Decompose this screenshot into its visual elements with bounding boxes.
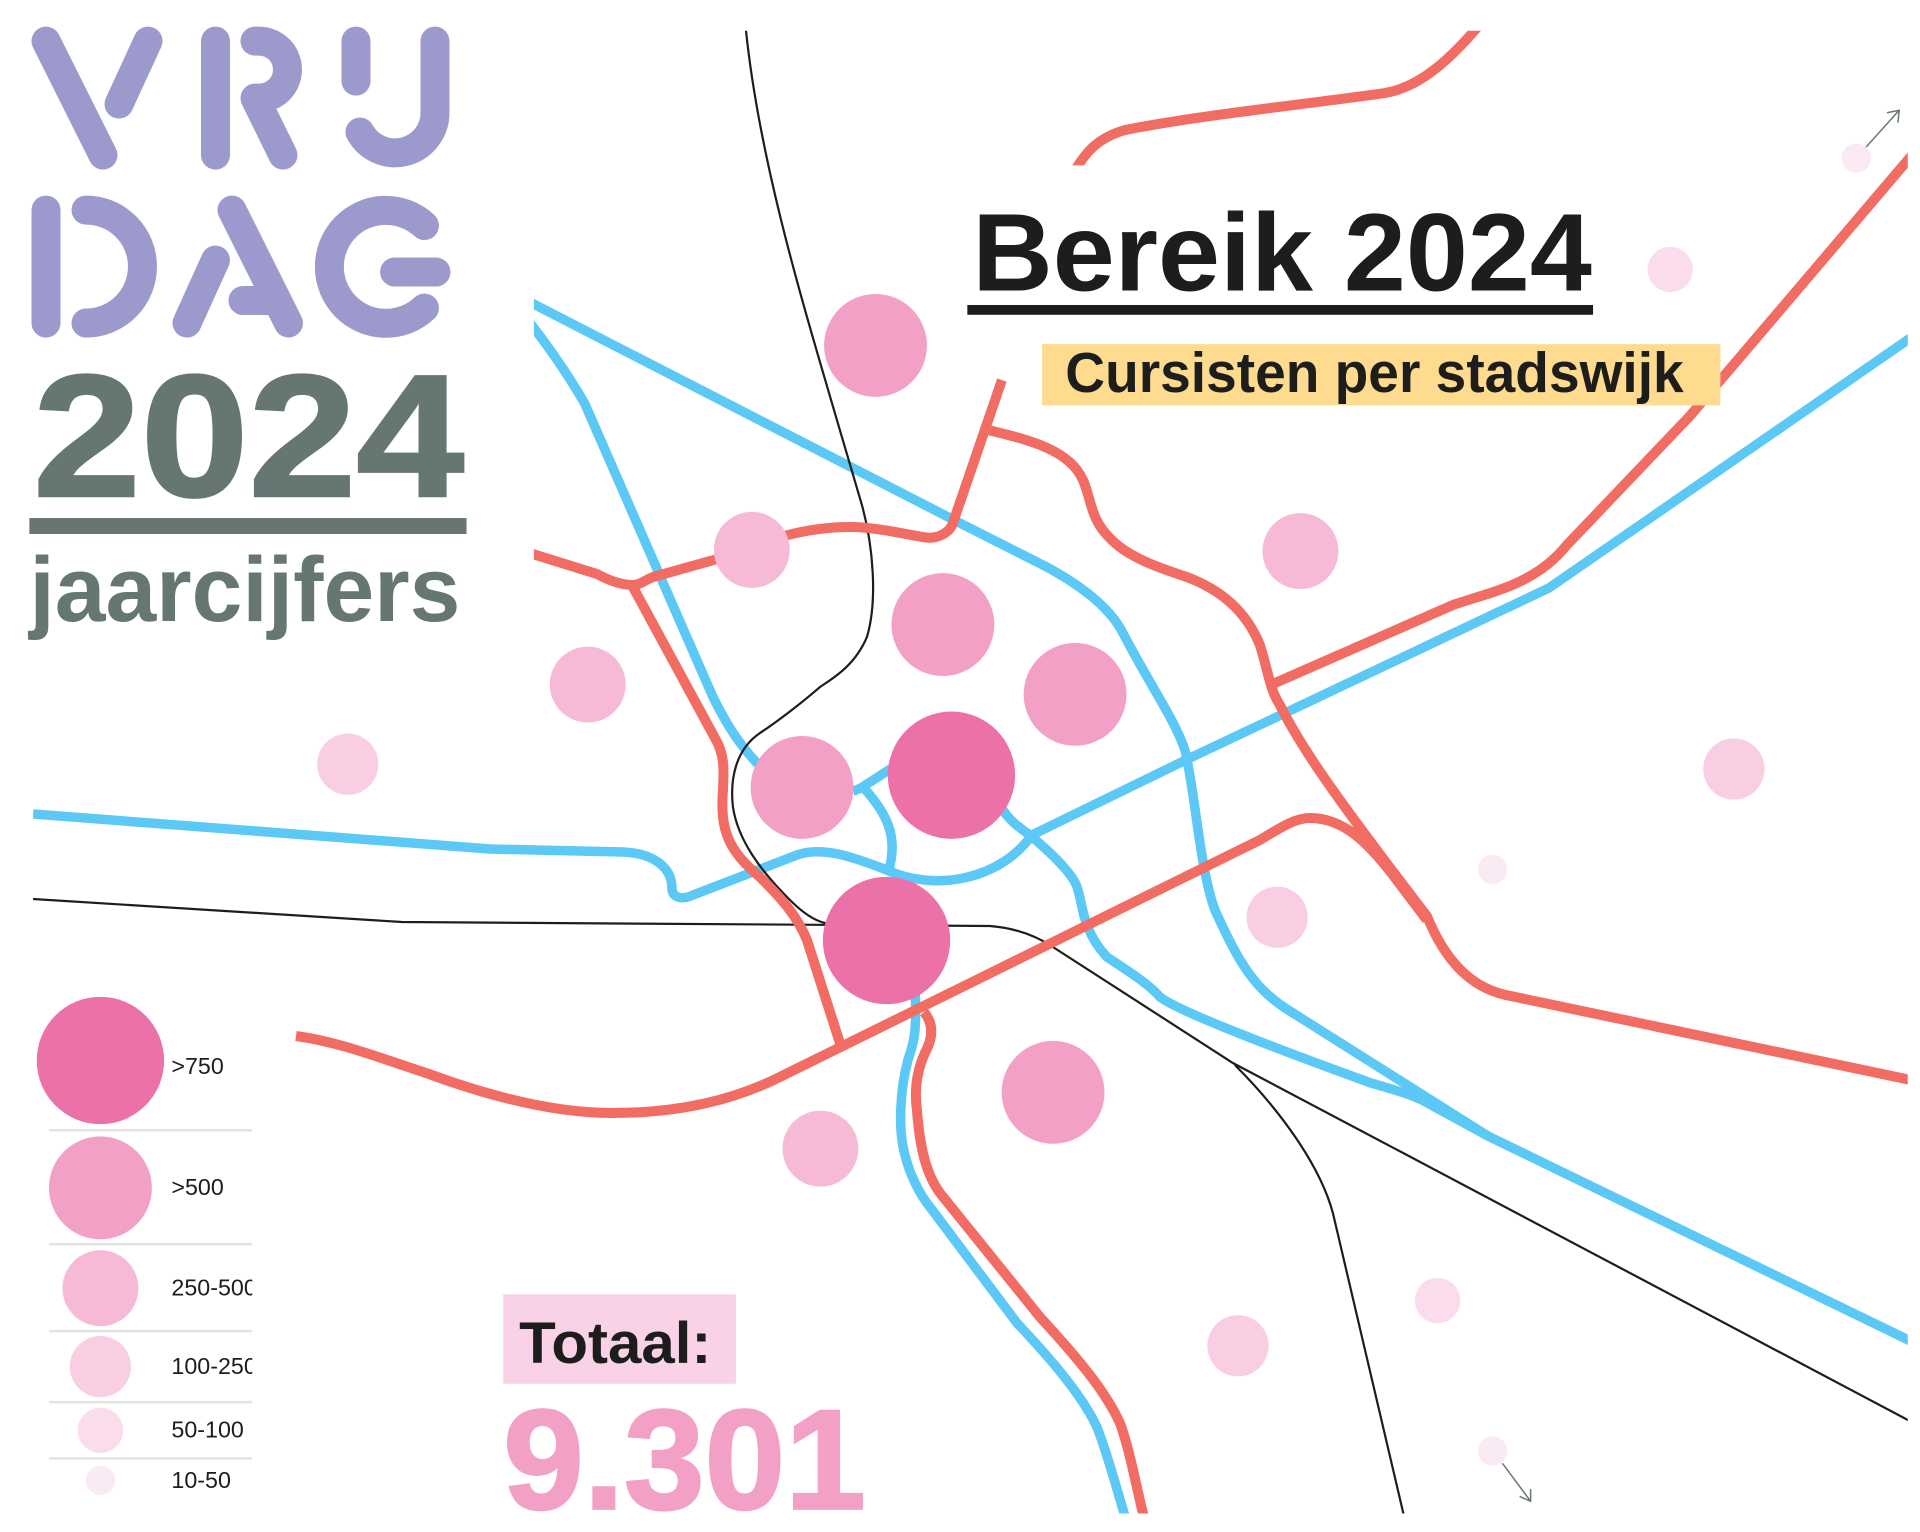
legend item: >750 — [37, 997, 224, 1124]
title: Bereik 2024: Bereik 2024 — [972, 191, 1592, 314]
subtitle: Cursisten per stadswijk: Cursisten per stadswijk — [1065, 341, 1684, 404]
map: water lines entering from the map edge (blue) — [520, 297, 1920, 1348]
wordmark: VRIJ DAG — [46, 41, 436, 323]
legend item: 100-250: 100-250 — [171, 1353, 257, 1379]
arrow: bottom right, off-map neighbourhood — [1502, 1463, 1531, 1501]
map: road from the southwest (red) — [296, 818, 1427, 1113]
arrow: top right, off-map neighbourhood — [1866, 110, 1899, 147]
total label: Totaal: Totaal: — [519, 1311, 711, 1376]
legend: circle sizes — [37, 997, 257, 1495]
legend item: 50-100: 50-100 — [171, 1417, 244, 1443]
subtitle jaarcijfers: jaarcijfers — [27, 539, 460, 641]
legend item: >500 — [49, 1136, 224, 1239]
legend item: 250-500 — [62, 1250, 257, 1326]
total label: Totaal — [503, 1294, 736, 1384]
map: neighbourhood circles sized by number of students — [317, 143, 1871, 1466]
legend item: >500: >500 — [171, 1174, 224, 1200]
map: water lines (blue) — [33, 328, 1920, 1532]
logo: VRIJDAG 2024 jaarcijfers — [27, 41, 467, 641]
legend item: 10-50: 10-50 — [171, 1467, 231, 1493]
map: main roads (red) — [520, 140, 1920, 1532]
legend item: 250-500: 250-500 — [171, 1275, 257, 1301]
year 2024: 2024 — [33, 339, 464, 533]
map: road north segment (red) — [1072, 30, 1482, 166]
legend item: >750: >750 — [171, 1053, 224, 1079]
rule under year — [29, 518, 467, 534]
legend item: 10-50 — [86, 1466, 231, 1495]
legend item: 50-100 — [78, 1408, 244, 1453]
legend item: 100-250 — [70, 1336, 257, 1397]
